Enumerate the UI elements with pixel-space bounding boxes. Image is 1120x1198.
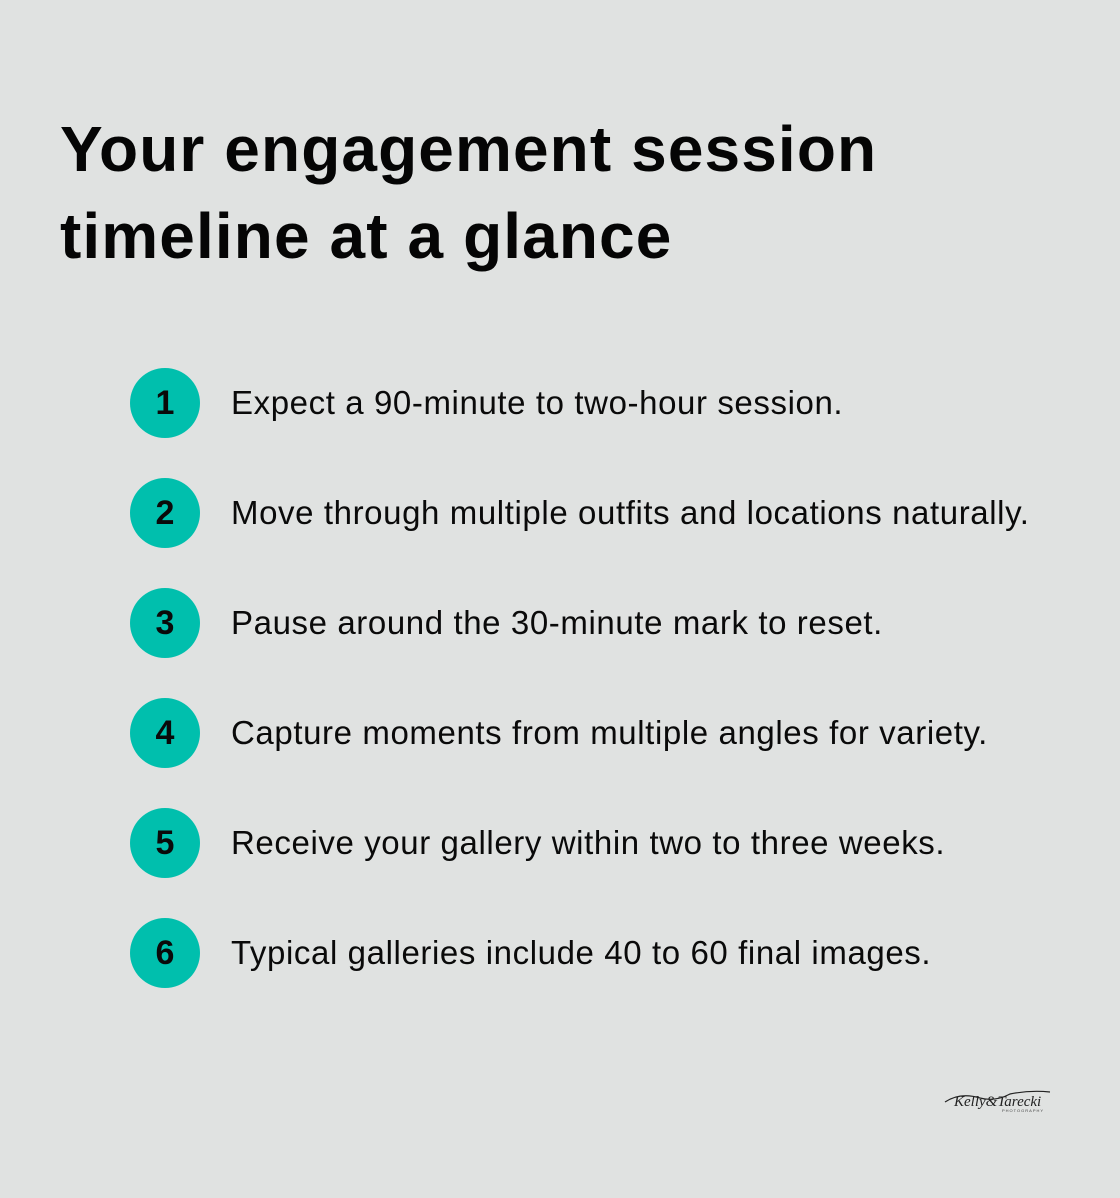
item 1: Expect a 90-minute to two-hour session. <box>231 384 843 421</box>
item 3: Pause around the 30-minute mark to reset. <box>231 604 883 641</box>
item 2: Move through multiple outfits and locations naturally. <box>231 494 1030 531</box>
item 4: Capture moments from multiple angles for variety. <box>231 714 988 751</box>
item 5 <box>130 808 945 878</box>
title: timeline at a glance <box>60 200 672 272</box>
item 5: 5 <box>156 824 174 862</box>
item 2: 2 <box>156 494 174 532</box>
item 5: Receive your gallery within two to three weeks. <box>231 824 945 861</box>
item 1 <box>130 368 843 438</box>
item 4 <box>130 698 988 768</box>
item 3 <box>130 588 883 658</box>
item 6 <box>130 918 931 988</box>
logo signature <box>944 1090 1050 1113</box>
logo signature: PHOTOGRAPHY <box>1002 1108 1044 1113</box>
item 6: 6 <box>156 934 174 972</box>
item 2 <box>130 478 1030 548</box>
item 6: Typical galleries include 40 to 60 final images. <box>231 934 931 971</box>
title <box>60 113 877 272</box>
item 1: 1 <box>156 384 174 422</box>
title: Your engagement session <box>60 113 877 185</box>
item 4: 4 <box>156 714 174 752</box>
item 3: 3 <box>156 604 174 642</box>
logo signature: Kelly&Tarecki <box>953 1094 1041 1110</box>
